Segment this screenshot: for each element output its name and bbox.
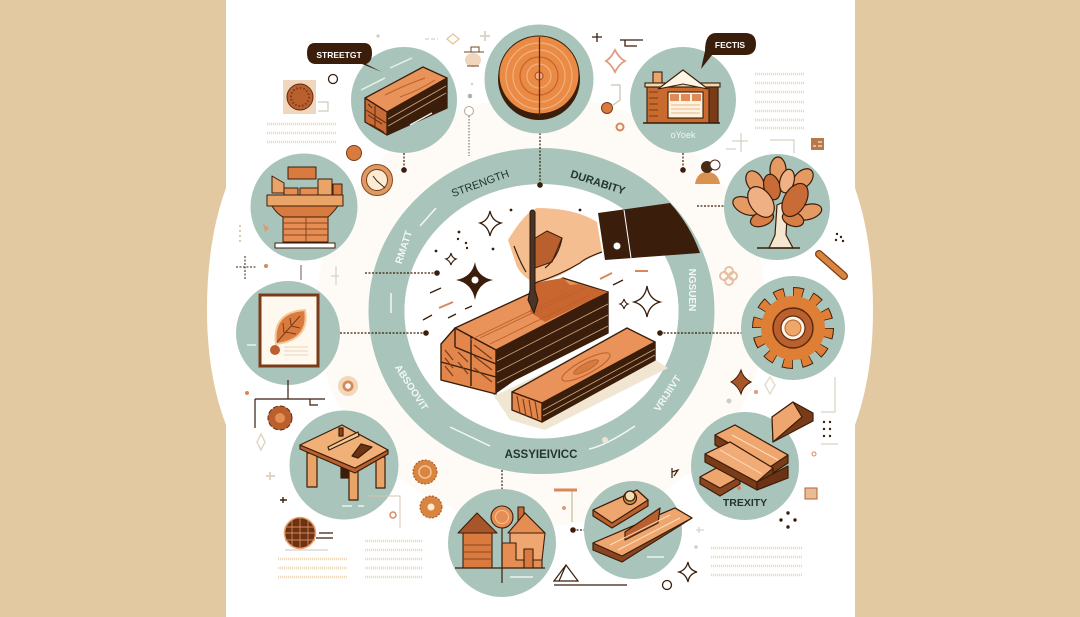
- houses icon: [455, 506, 545, 583]
- ring label: absoovit: ABSOOVIT: [392, 363, 430, 413]
- icon: globe: [284, 518, 333, 550]
- house icon: [643, 70, 720, 123]
- tree icon: [730, 157, 823, 248]
- icon: plus and marks right: [726, 133, 794, 153]
- chisel: [528, 210, 538, 313]
- icon: small ring: [328, 74, 338, 84]
- icon: pink star: [606, 50, 625, 72]
- sleeve: [598, 203, 700, 260]
- decorative text lines: [267, 74, 804, 577]
- callout: fectis: [701, 33, 756, 69]
- icon: flower: [268, 406, 292, 430]
- gear icon: [758, 293, 828, 363]
- icon: left cog: [338, 376, 358, 396]
- icon: dowel: [819, 254, 844, 276]
- single plank: [512, 328, 655, 422]
- panel: framed leaf: [236, 281, 340, 385]
- ring label: strength: STRENGTH: [450, 168, 511, 200]
- icon: small square badge top right: [811, 138, 824, 150]
- hand: [508, 208, 602, 283]
- wedge icon: [772, 402, 813, 442]
- callout: streetgt: STREETGT: [316, 50, 362, 60]
- icon: figure: [464, 47, 484, 67]
- panel: houses: [448, 489, 556, 597]
- ring label: vrijiivt: VRIJIIVT: [653, 374, 684, 414]
- shadow under lumber: [494, 340, 668, 430]
- house label: oYoek: [671, 130, 696, 140]
- icon: bottom bracket: [554, 490, 577, 522]
- log cross-section: [498, 36, 580, 120]
- callout: streetgt: [307, 43, 382, 72]
- panel: pedestal blocks: [250, 154, 358, 260]
- icon: tiny mark center: [672, 468, 678, 478]
- icon: diamond sparkle top: [376, 31, 490, 44]
- ring label: right side: NGSUEN: [686, 269, 697, 311]
- icon: top marks: [592, 33, 643, 46]
- boards icon: [593, 490, 692, 562]
- panel: house: [630, 47, 736, 153]
- icon: small marks lower right: [726, 377, 838, 499]
- icon: cookie badge: [283, 80, 328, 114]
- ring label: rmatt: RMATT: [394, 229, 415, 265]
- panel: lumber beam: [351, 47, 457, 153]
- icon: small wood coin: [346, 146, 362, 160]
- icon: left bracket: [255, 380, 325, 428]
- trexity label: TREXITY: [723, 497, 767, 509]
- planks icon: [700, 425, 788, 496]
- panel: table: [290, 410, 398, 520]
- pedestal icon: [267, 167, 343, 248]
- icon: tiny dots top right: [835, 233, 844, 242]
- white central panel: [207, 0, 873, 617]
- icon: clock: [362, 164, 392, 196]
- panel: tree: [724, 154, 830, 260]
- icon: petal knot: [720, 267, 737, 285]
- beam icon: [365, 67, 447, 135]
- panel: boards: [584, 481, 692, 579]
- lumber stack: [441, 278, 608, 394]
- panel: log: [484, 24, 594, 134]
- icon: saw coins: [367, 460, 442, 528]
- icon: left marks: [245, 391, 287, 503]
- icon: pin ring: [464, 83, 474, 156]
- callout: fectis: FECTIS: [715, 40, 745, 50]
- table icon: [300, 425, 388, 500]
- central ring: [386, 166, 697, 461]
- main illustration: lumber and hand: [423, 203, 700, 430]
- panel: gear: [741, 276, 845, 380]
- icon: four dots: [779, 511, 797, 529]
- sparkles: [423, 209, 660, 320]
- icon: person: [695, 160, 720, 184]
- panel: planks: [691, 402, 813, 520]
- icon: left cross marks: [236, 224, 339, 285]
- icon: bottom sparkle and ring: [662, 527, 704, 590]
- frame icon: [260, 295, 318, 366]
- ring label: durability: DURABITY: [569, 168, 627, 198]
- ring label: assyieivicc: ASSYIEIVICC: [505, 449, 577, 461]
- icon: brown diamond: [731, 370, 751, 394]
- icon: hanging tag: [602, 85, 624, 130]
- icon: tent: [554, 565, 627, 585]
- connector lines: [333, 133, 752, 533]
